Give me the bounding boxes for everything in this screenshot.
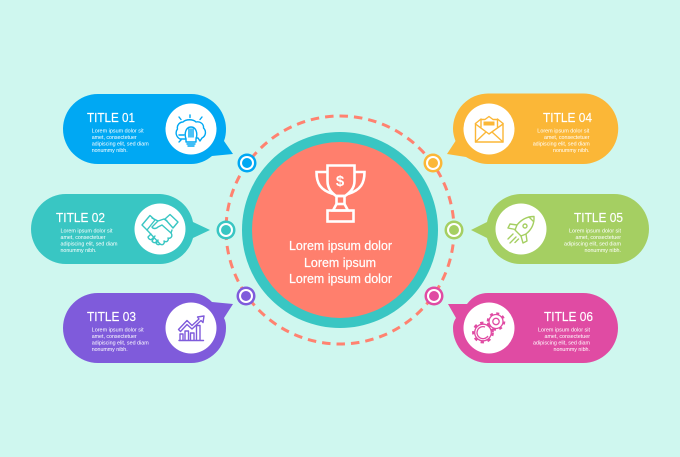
icon: open envelope: [476, 116, 503, 142]
panel: title 06: [448, 293, 618, 363]
body text: nonummy nibh.: [584, 248, 621, 254]
panel: title 02: [31, 194, 210, 264]
body text: amet, consectetuer: [92, 334, 137, 340]
panel: title 04: [447, 94, 618, 164]
body text: adipiscing elit, sed diam: [533, 341, 591, 347]
node: title 01: [238, 154, 256, 172]
body text: Lorem ipsum dolor sit: [92, 328, 144, 334]
icon: brain with light bulb: [176, 115, 205, 146]
title: TITLE 02: [56, 210, 105, 225]
icon: trophy: [316, 166, 364, 222]
body text: [564, 228, 622, 254]
central text: [289, 239, 392, 286]
node: title 04: [424, 154, 442, 172]
central text: Lorem ipsum dolor: [289, 272, 392, 286]
body text: Lorem ipsum dolor sit: [537, 128, 590, 134]
title: TITLE 05: [574, 210, 623, 225]
icon: rocket: [508, 216, 534, 243]
panel: title 01: [63, 94, 233, 164]
body text: amet, consectetuer: [544, 135, 590, 141]
body text: adipiscing elit, sed diam: [564, 242, 622, 248]
icon: trophy: $: [336, 173, 345, 190]
body text: nonummy nibh.: [553, 148, 590, 154]
body text: [533, 328, 591, 353]
panel: title 03: [63, 293, 233, 363]
body text: nonummy nibh.: [92, 148, 128, 154]
panel: title 05: [471, 194, 649, 264]
body text: nonummy nibh.: [60, 248, 96, 254]
node: title 02: [216, 220, 236, 240]
body text: Lorem ipsum dolor sit: [569, 228, 622, 234]
body text: [92, 128, 149, 154]
body text: amet, consectetuer: [576, 235, 621, 241]
body text: [533, 128, 590, 154]
body text: adipiscing elit, sed diam: [533, 142, 590, 148]
central text: Lorem ipsum dolor: [289, 239, 392, 253]
body text: adipiscing elit, sed diam: [92, 142, 149, 148]
node: title 05: [444, 220, 464, 240]
title: TITLE 03: [87, 309, 136, 324]
node: title 06: [424, 286, 444, 306]
title: TITLE 04: [543, 110, 592, 125]
body text: nonummy nibh.: [554, 347, 590, 353]
body text: Lorem ipsum dolor sit: [92, 128, 144, 134]
body text: [60, 228, 118, 254]
body text: adipiscing elit, sed diam: [92, 341, 149, 347]
body text: Lorem ipsum dolor sit: [60, 228, 113, 234]
icon: gears: [473, 313, 504, 342]
icon: growth chart: [178, 316, 204, 340]
body text: nonummy nibh.: [92, 347, 128, 353]
body text: amet, consectetuer: [92, 135, 137, 141]
body text: amet, consectetuer: [60, 235, 106, 241]
icon: handshake: [142, 214, 178, 245]
body text: [92, 328, 149, 353]
body text: amet, consectetuer: [544, 334, 590, 340]
title: TITLE 01: [87, 110, 135, 125]
central hub: [242, 132, 438, 328]
body text: Lorem ipsum dolor sit: [538, 328, 591, 334]
dashed orbit ring: [226, 116, 454, 344]
title: TITLE 06: [544, 309, 593, 324]
central text: Lorem ipsum: [304, 256, 376, 270]
body text: adipiscing elit, sed diam: [60, 242, 118, 248]
node: title 03: [236, 286, 256, 306]
